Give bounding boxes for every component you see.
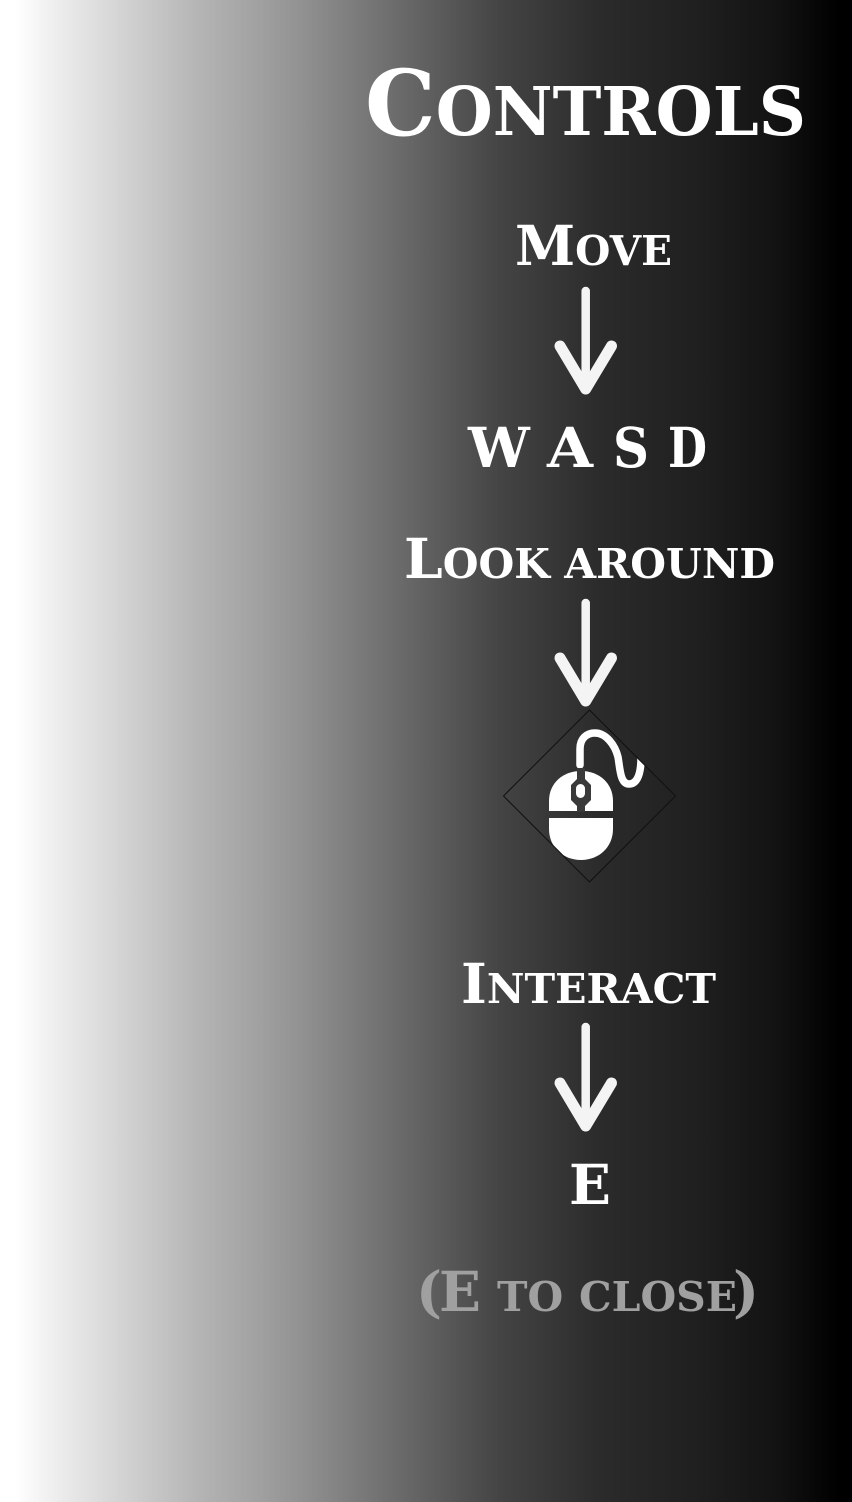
icon: mouse in diamond (504, 710, 676, 882)
heading: interact: INTERACT (461, 951, 716, 1016)
note: E to close: ( (416, 1259, 442, 1324)
keys: W A S D: S (613, 415, 649, 480)
heading: look around: LOOK AROUND (404, 526, 775, 591)
keys: W A S D: D (668, 415, 707, 480)
note: E to close: CLOSE (579, 1273, 737, 1321)
icon: mouse cable (580, 733, 641, 784)
keys: W A S D: A (546, 415, 594, 480)
icon: mouse scroll wheel (576, 784, 585, 798)
title: CONTROLS (365, 51, 806, 157)
icon: mouse wheel channel (571, 768, 591, 812)
keys: W A S D: W (467, 415, 531, 480)
icon: mouse body bottom (549, 818, 613, 860)
note: E to close: ) (733, 1259, 759, 1324)
keys: W A S D (467, 415, 707, 480)
key: E: E (569, 1152, 611, 1217)
icon: mouse body top (549, 771, 613, 811)
arrow: move to keys (560, 291, 612, 389)
arrow: look around to mouse (560, 603, 612, 701)
note: E to close: TO (497, 1273, 563, 1321)
icon: diamond outline (504, 710, 676, 882)
heading: move: MOVE (515, 213, 672, 278)
arrow: interact to key (560, 1027, 612, 1126)
note: E to close: E (439, 1259, 481, 1324)
